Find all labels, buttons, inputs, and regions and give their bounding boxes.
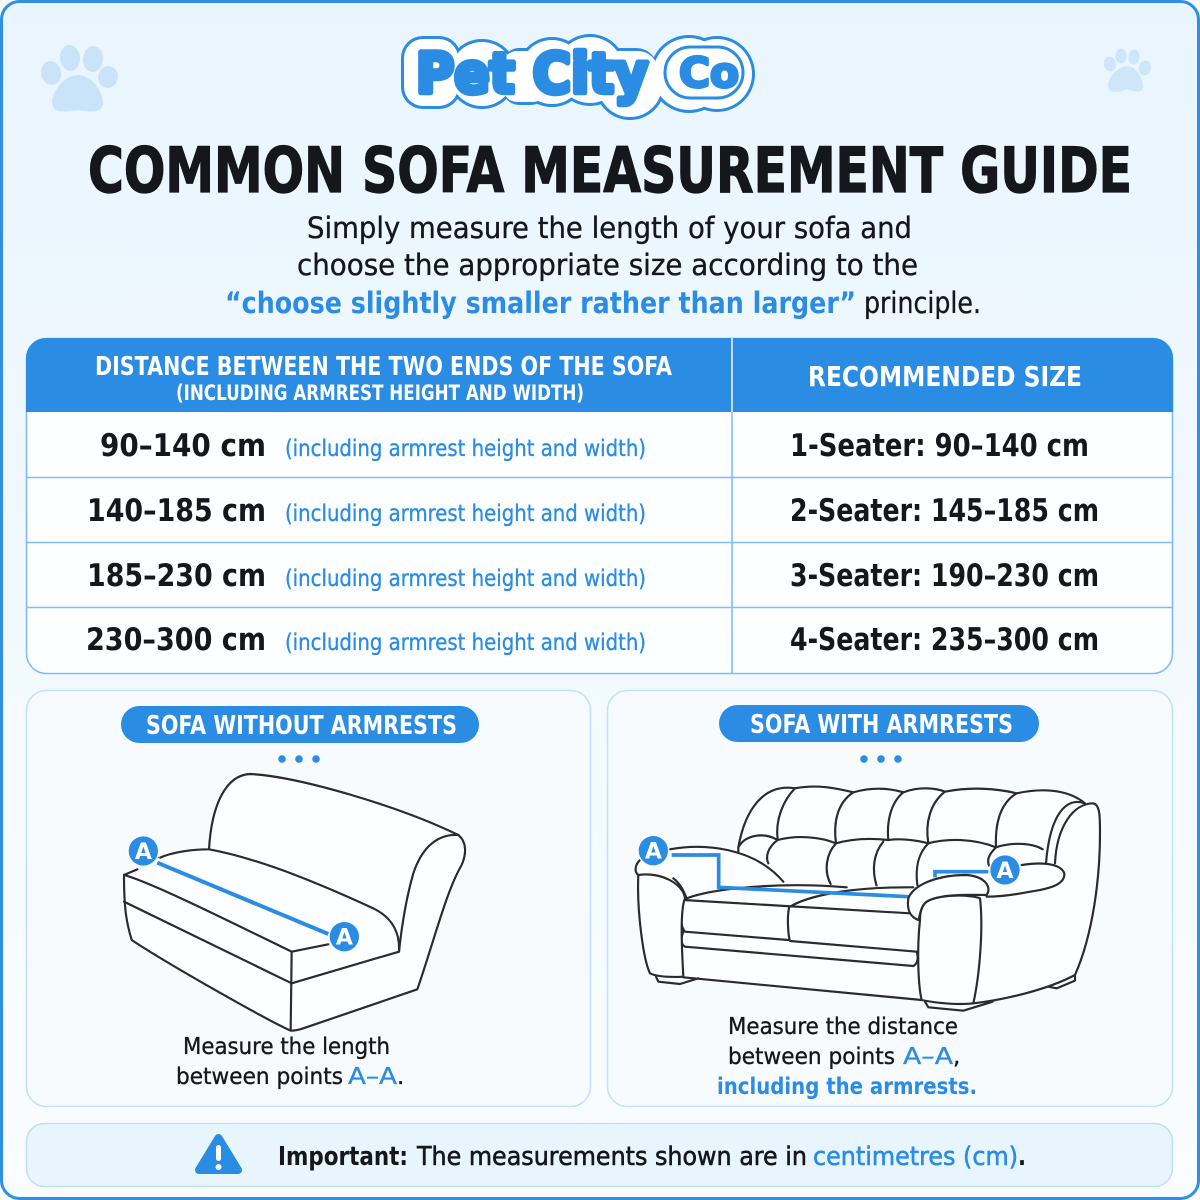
heading pill: sofa with armrests [719,705,1039,742]
note text: The measurements shown are in [416,1142,807,1172]
illustration: sofa with armrests with A–A line: A [996,859,1014,884]
caption: measure the length: . [397,1064,404,1090]
row: 185–230 cm: 3-Seater: 190–230 cm [790,558,1099,594]
size table [26,338,1173,674]
table header: (INCLUDING ARMREST HEIGHT AND WIDTH) [176,381,584,405]
caption: measure the distance: including the armrests. [717,1074,977,1100]
note text: Important: [278,1142,408,1172]
row: 230–300 cm: 4-Seater: 235–300 cm [790,622,1099,658]
illustration: sofa without armrests with A–A line: A [336,926,353,951]
right front arm [918,896,981,1004]
row: 185–230 cm [87,558,1099,594]
row: 90–140 cm: 90–140 cm [100,428,266,464]
table header [26,338,1173,412]
caption: measure the distance: A–A [903,1044,953,1070]
table header: RECOMMENDED SIZE [808,360,1082,393]
caption: measure the distance: , [953,1044,960,1070]
caption: measure the length: between points [176,1064,343,1090]
logo: Pet City Co: Co [679,49,739,97]
caption: measure the distance: Measure the distance [728,1014,958,1040]
dots [860,755,902,763]
row: 140–185 cm: 2-Seater: 145–185 cm [790,493,1099,529]
illustration: sofa with armrests with A–A line: A [645,840,662,865]
note text: centimetres (cm) [813,1142,1018,1172]
row: 90–140 cm: 1-Seater: 90–140 cm [790,428,1089,464]
caption: measure the distance: between points [728,1044,895,1070]
caption: measure the length [176,1034,404,1090]
caption: measure the distance [717,1014,977,1100]
row: 185–230 cm: 185–230 cm [87,558,266,594]
row: 140–185 cm: (including armrest height and width) [285,501,646,527]
dots [278,755,320,763]
heading pill: sofa with armrests: SOFA WITH ARMRESTS [750,710,1013,740]
icon: paw print left [39,44,120,112]
caption: measure the length: A–A [348,1064,397,1090]
body [683,885,920,1000]
subtitle text block: choose the appropriate size according to the [297,248,918,282]
row: 90–140 cm: (including armrest height and width) [285,436,646,462]
logo: Pet City Co [401,34,755,120]
right outer arm [973,803,1100,1003]
subtitle text block: “choose slightly smaller rather than larger” [225,286,856,320]
measuring line [672,855,908,897]
icon: warning triangle [199,1138,238,1170]
note text [278,1142,1026,1172]
panel: sofa without armrests [26,690,590,1106]
left arm pillar [638,874,685,977]
illustration: sofa with armrests with A–A line [636,787,1100,1011]
illustration: sofa without armrests with A–A line: A [135,840,152,865]
row: 140–185 cm: 140–185 cm [87,493,266,529]
icon: paw print right [1103,48,1152,92]
table header: DISTANCE BETWEEN THE TWO ENDS OF THE SOFA [95,352,672,382]
illustration: sofa without armrests with A–A line [124,774,465,1031]
subtitle text block: Simply measure the length of your sofa and [307,211,912,245]
row: 230–300 cm: 230–300 cm [86,622,266,658]
row: 185–230 cm: (including armrest height and width) [285,566,646,592]
row: 140–185 cm [87,493,1099,529]
heading pill: sofa without armrests [121,706,479,743]
caption: measure the length: Measure the length [183,1034,390,1060]
row: 230–300 cm: (including armrest height and width) [285,630,646,656]
heading pill: sofa without armrests: SOFA WITHOUT ARMRESTS [146,711,457,741]
note text: . [1018,1142,1026,1172]
row: 230–300 cm [86,622,1099,658]
panel: sofa with armrests [608,690,1172,1106]
subtitle text block: principle. [864,286,981,320]
row: 90–140 cm [100,428,1089,464]
subtitle text block [225,211,981,320]
callout: important note [26,1124,1172,1186]
logo: Pet City Co: Pet City [416,42,648,106]
